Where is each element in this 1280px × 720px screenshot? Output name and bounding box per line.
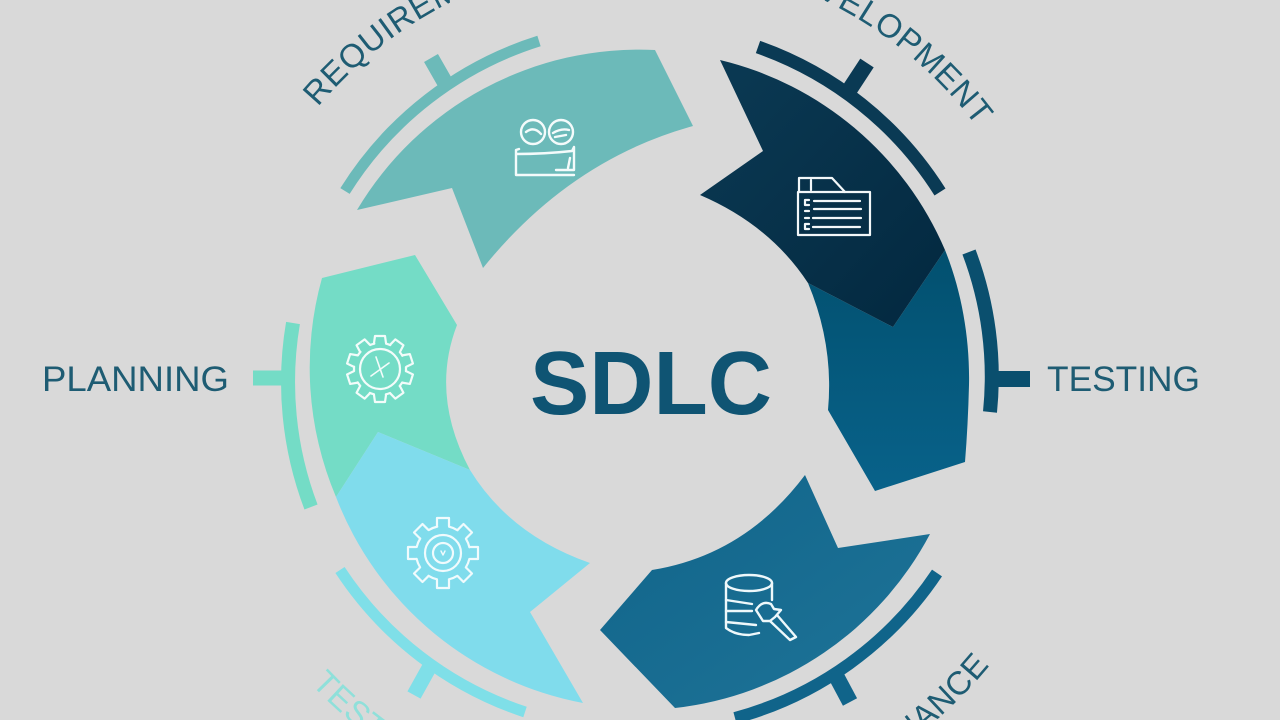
icon: database with wrench (726, 575, 796, 640)
development bracket arc and tick (758, 47, 940, 192)
segment: design (316, 432, 590, 720)
segment: development (700, 0, 994, 327)
planning bracket arc and tick (253, 323, 311, 507)
maintenance bracket arc and tick (735, 573, 937, 718)
segment: requirements (302, 0, 693, 268)
title: SDLC: SDLC (530, 334, 772, 434)
requirements bracket arc and tick (345, 41, 539, 191)
design bracket arc and tick (340, 570, 525, 712)
planning shape (310, 255, 470, 497)
icon: document with list (798, 178, 870, 235)
development arrow shape (700, 60, 945, 327)
segment: maintenance (600, 475, 989, 720)
maintenance arrow shape (600, 475, 930, 708)
segment: planning (42, 255, 470, 507)
testing bracket arc and tick (969, 252, 1030, 412)
testing shape (808, 250, 969, 491)
icon: two people at a desk (516, 120, 574, 175)
design arrow shape (336, 432, 590, 703)
icon: gear with target (408, 518, 478, 588)
label: testing: TESTING (1047, 360, 1200, 399)
label: planning: PLANNING (42, 360, 229, 399)
icon: gear with cross (347, 336, 413, 402)
segment: testing (808, 250, 1200, 491)
requirements arrow shape (357, 50, 693, 268)
